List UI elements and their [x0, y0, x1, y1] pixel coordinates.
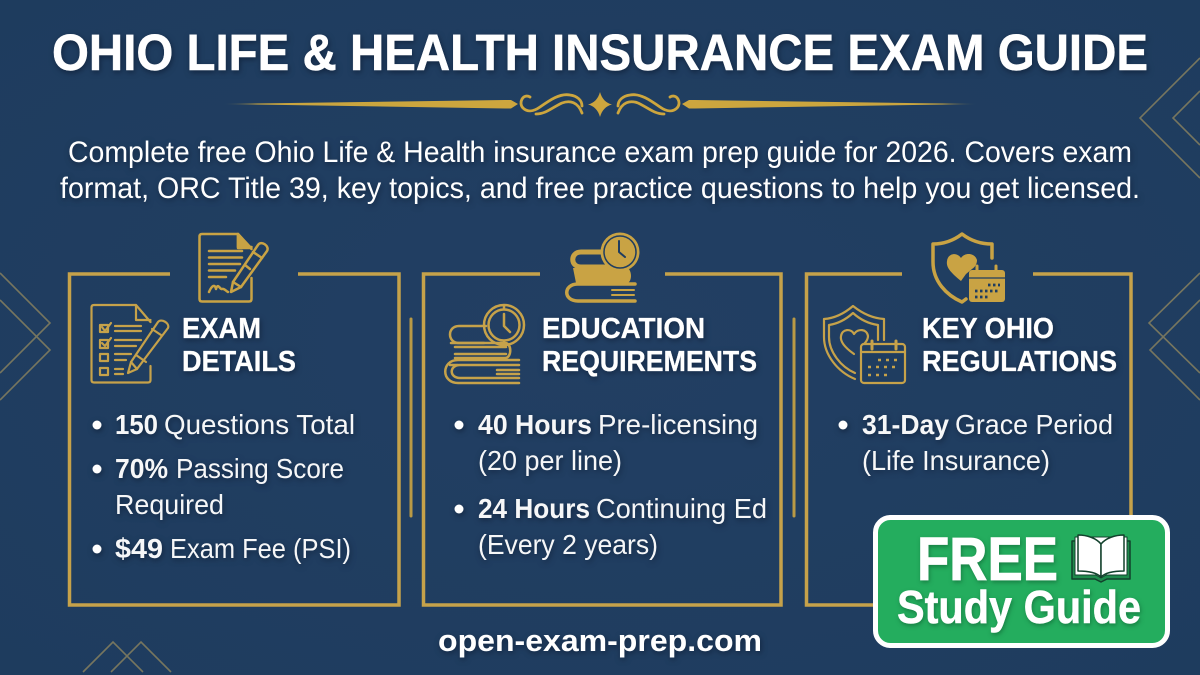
bullet list: (Life Insurance)	[862, 445, 1050, 476]
icon: open book	[1072, 535, 1130, 582]
bullet list	[838, 409, 1113, 476]
panel frame	[70, 274, 399, 605]
badge text	[897, 525, 1141, 633]
bullet list: 24 Hours	[478, 493, 590, 524]
panel frame	[806, 274, 1131, 605]
heading: EDUCATION	[542, 313, 705, 345]
bullet list: (Every 2 years)	[478, 529, 658, 560]
website footer: open-exam-prep.com	[438, 623, 762, 658]
bullet list: Passing Score	[176, 453, 344, 484]
bullet list: 70%	[115, 453, 168, 484]
panel: education requirements	[424, 232, 781, 605]
badge text: FREE	[917, 525, 1058, 593]
separators	[411, 319, 794, 516]
heading: REGULATIONS	[922, 346, 1117, 378]
heading: KEY OHIO	[922, 313, 1054, 345]
bullet list: (20 per line)	[478, 445, 622, 476]
heading	[922, 313, 1117, 378]
bullet list: Questions Total	[164, 409, 355, 440]
heading: DETAILS	[182, 346, 296, 378]
icon: books and clock outline	[445, 305, 524, 383]
badge text: Study Guide	[897, 581, 1141, 633]
bullet list: Exam Fee (PSI)	[170, 533, 351, 564]
title: OHIO LIFE & HEALTH INSURANCE EXAM GUIDE	[52, 24, 1148, 81]
heading: EXAM	[182, 313, 261, 345]
bullet list	[92, 409, 355, 564]
bullet list: Continuing Ed	[596, 493, 767, 524]
icon: signed document with pencil	[200, 234, 268, 302]
bullet list: Pre-licensing	[598, 409, 758, 440]
icon: checklist with pencil	[92, 305, 168, 382]
bullet list: $49	[115, 533, 163, 564]
heading	[182, 313, 296, 378]
icon: shield heart calendar filled	[933, 234, 1005, 302]
heading	[542, 313, 757, 378]
panel: exam details	[70, 234, 399, 605]
bullet list: 31-Day	[862, 409, 949, 440]
panel frame	[424, 274, 781, 605]
heading: REQUIREMENTS	[542, 346, 757, 378]
bullet list	[454, 409, 767, 560]
bullet list: Grace Period	[955, 409, 1113, 440]
intro text: Complete free Ohio Life & Health insurance exam prep guide for 2026. Covers exam	[68, 136, 1132, 169]
panel: key ohio regulations	[806, 234, 1131, 605]
icon: books and clock filled	[567, 232, 640, 301]
intro text: format, ORC Title 39, key topics, and free practice questions to help you get licensed.	[60, 172, 1140, 205]
bullet list: 150	[115, 409, 158, 440]
ornamental divider	[222, 92, 978, 117]
badge: free study guide	[876, 518, 1168, 646]
bullet list: 40 Hours	[478, 409, 592, 440]
intro text	[60, 136, 1140, 205]
icon: shield heart calendar outline	[824, 306, 905, 383]
bullet list: Required	[115, 489, 224, 520]
